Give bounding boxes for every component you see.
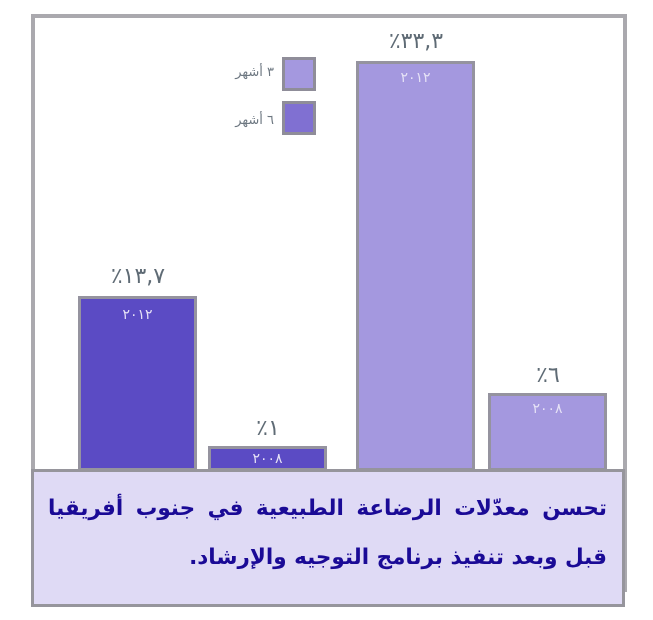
bar: 3 months 2008 — [488, 393, 607, 471]
caption panel — [31, 469, 625, 607]
legend: 3 months — [234, 57, 316, 91]
year label: 2012: ٢٠١٢ — [122, 307, 153, 323]
value label: 13.7%: ٪١٣,٧ — [111, 264, 165, 289]
bar: 6 months 2012 — [78, 296, 197, 471]
value label: 1%: ٪١ — [256, 416, 280, 441]
legend swatch: 6 months — [282, 101, 316, 135]
year label: 2008: ٢٠٠٨ — [532, 401, 563, 417]
caption text line 1: تحسن معدّلات الرضاعة الطبيعية في جنوب أفريقيا — [48, 496, 607, 521]
bar: 3 months 2012 — [356, 61, 475, 471]
value label: 33.3%: ٪٣٣,٣ — [389, 29, 443, 54]
year label: 2012: ٢٠١٢ — [400, 70, 431, 86]
caption text line 2: قبل وبعد تنفيذ برنامج التوجيه والإرشاد. — [189, 545, 607, 570]
year label: 2008: ٢٠٠٨ — [252, 451, 283, 467]
legend label: 3 months: ٣ أشهر — [235, 65, 274, 80]
legend label: 6 months: ٦ أشهر — [235, 113, 274, 128]
legend swatch: 3 months — [282, 57, 316, 91]
value label: 6%: ٪٦ — [536, 363, 560, 388]
legend: 6 months — [234, 101, 316, 135]
bar: 6 months 2008 — [208, 446, 327, 471]
